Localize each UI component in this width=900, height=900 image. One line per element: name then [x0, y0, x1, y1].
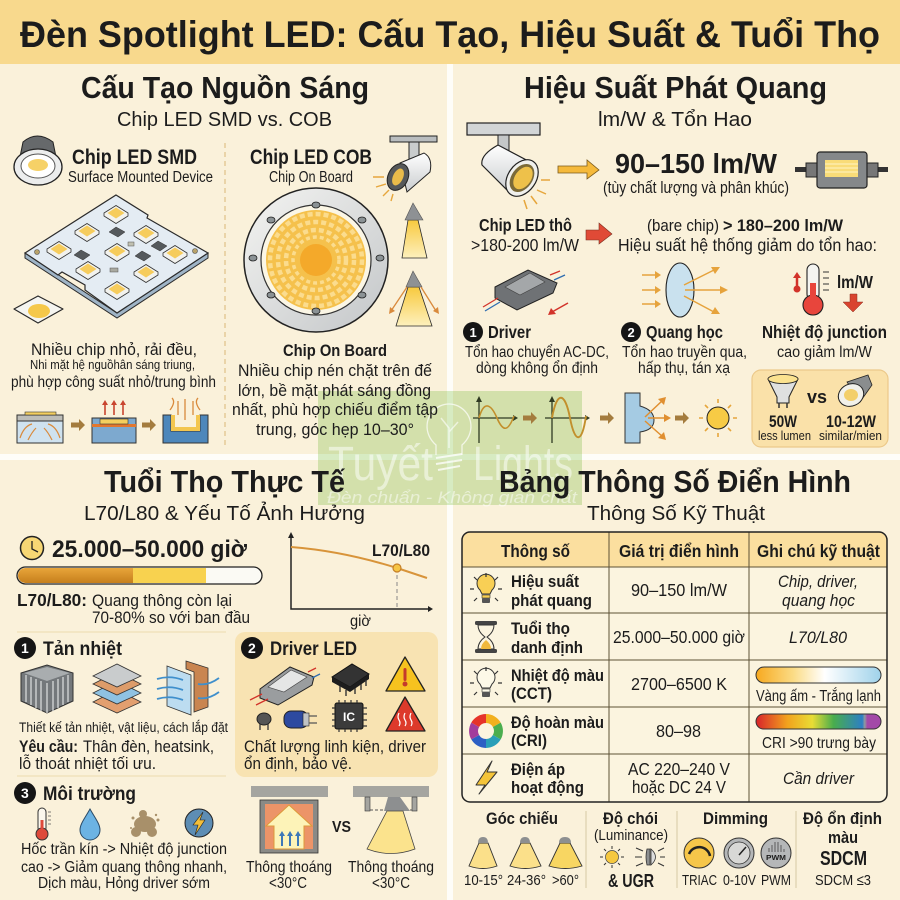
icon: downlight	[14, 136, 62, 185]
icon: thermometer	[36, 808, 51, 840]
scene: enclosed recess	[246, 786, 332, 892]
icon: dust	[130, 810, 160, 837]
watermark: Tuyết	[328, 438, 433, 491]
loss 2: optics: Tổn hao truyền qua,	[622, 344, 747, 361]
panel: tuổi thọ thực tế	[0, 460, 447, 900]
factor 3: environment	[14, 782, 227, 892]
SMD description	[11, 340, 216, 391]
heading: Hiệu Suất Phát Quang	[524, 70, 827, 105]
scene: ventilated: Thông thoáng	[348, 859, 434, 876]
watermark: Lights	[473, 438, 573, 491]
SMD board	[25, 195, 208, 318]
factor 3: environment: Môi trường	[43, 784, 136, 805]
callout: 50W vs 10-12W: vs	[807, 387, 827, 407]
row: tuổi thọ: 25.000–50.000 giờ	[613, 627, 745, 647]
row: tuổi thọ: danh định	[511, 638, 583, 657]
scene: ventilated	[348, 786, 434, 892]
SMD heading: Chip LED SMD	[72, 145, 197, 169]
row: điện áp	[476, 759, 855, 797]
VS label: VS	[332, 819, 351, 836]
icon: LED module	[795, 152, 888, 188]
divider	[17, 631, 226, 633]
factor 1: heat dissipation	[14, 637, 228, 773]
dimming: 0-10V	[723, 872, 756, 889]
beam angle: >60°	[552, 872, 579, 889]
factor 1: heat dissipation: Thân đèn, heatsink,	[83, 738, 214, 756]
icon: heat warning triangle	[386, 697, 425, 731]
row: hiệu suất	[470, 572, 858, 610]
row: nhiệt độ màu: (CCT)	[511, 684, 552, 703]
callout: 50W vs 10-12W: 10-12W	[826, 413, 876, 431]
loss 2: optics: 2	[628, 325, 635, 340]
arrow	[558, 160, 599, 179]
row: tuổi thọ: Tuổi thọ	[511, 619, 570, 638]
beam angle: 10-15°	[464, 872, 503, 889]
factor 1: heat dissipation: Thiết kế tản nhiệt, vật liệu, cách lắp đặt	[19, 720, 228, 735]
dimming: TRIAC	[682, 872, 717, 889]
beam angle: Góc chiếu	[486, 809, 558, 828]
dimming	[682, 809, 791, 889]
icon: thermometer and falling lm/W: lm/W	[837, 272, 873, 292]
callout: 50W vs 10-12W: 50W	[769, 413, 797, 431]
wave diagrams and optics flow	[473, 393, 737, 443]
wide beam icon	[389, 271, 439, 326]
icon: driver	[483, 270, 568, 315]
COB description: lớn, bề mặt phát sáng đồng	[238, 381, 431, 400]
key efficacy value: 90–150 lm/W	[615, 148, 778, 179]
SMD description: phù hợp công suất nhỏ/trung bình	[11, 374, 216, 391]
icon: lens	[642, 263, 728, 317]
loss 2: optics	[621, 322, 747, 377]
row: hiệu suất: quang học	[782, 591, 855, 610]
table header: Ghi chú kỹ thuật	[757, 541, 880, 561]
dimming: PWM	[761, 872, 791, 889]
COB heading: Chip LED COB	[250, 145, 372, 169]
row: hiệu suất: 90–150 lm/W	[631, 580, 727, 600]
row: nhiệt độ màu: 2700–6500 K	[631, 674, 727, 694]
SMD subtitle: Surface Mounted Device	[68, 169, 213, 186]
factor 2: LED driver panel: Chất lượng linh kiện, driver	[244, 738, 426, 756]
narrow beam icon	[402, 203, 427, 258]
color stability: Độ ổn định	[803, 809, 882, 828]
row: hiệu suất: phát quang	[511, 591, 592, 610]
row: độ hoàn màu	[474, 713, 881, 752]
row: độ hoàn màu: (CRI)	[511, 731, 547, 750]
scene: ventilated: <30°C	[372, 875, 410, 892]
loss 2: optics: Quang học	[646, 322, 723, 342]
icon: clock	[20, 536, 44, 560]
loss 3: junction temperature: cao giảm lm/W	[777, 344, 872, 361]
heading: Cấu Tạo Nguồn Sáng	[81, 70, 369, 105]
L70/L80 definition: Quang thông còn lại	[92, 591, 232, 610]
icon: warning triangle	[386, 657, 425, 691]
raw chip label: Chip LED thô	[479, 215, 572, 235]
factor 2: LED driver panel: ổn định, bảo vệ.	[244, 755, 352, 773]
callout: 50W vs 10-12W: less lumen	[758, 428, 811, 443]
lifetime bar	[17, 567, 262, 584]
COB description: Nhiều chip nén chặt trên đế	[238, 361, 433, 380]
callout: 50W vs 10-12W: similar/mien	[819, 428, 882, 443]
icon: components	[257, 700, 367, 732]
icon: track spotlight	[467, 123, 550, 209]
color stability: SDCM ≤3	[815, 872, 871, 889]
factor 3: environment: cao -> Giảm quang thông nhanh,	[21, 859, 227, 876]
row: tuổi thọ	[475, 619, 848, 657]
table header: Giá trị điển hình	[619, 541, 739, 561]
dimming: Dimming	[703, 809, 768, 828]
subheading: lm/W & Tổn Hao	[598, 109, 752, 131]
dimming: PWM	[766, 853, 786, 862]
icon: chip	[332, 664, 369, 696]
factor 2: LED driver panel	[235, 632, 438, 777]
header band	[0, 0, 900, 64]
divider	[17, 775, 226, 777]
icon: track spotlight	[373, 136, 437, 201]
COB description	[232, 341, 438, 439]
L70/L80 definition: 70-80% so với ban đầu	[92, 608, 250, 627]
table header	[501, 541, 880, 561]
COB description: nhất, phù hợp chiếu điểm tập	[232, 400, 438, 419]
divider	[224, 143, 226, 445]
row: điện áp: AC 220–240 V	[628, 759, 730, 779]
factor 1: heat dissipation: Yêu cầu:	[19, 738, 78, 756]
icon: heatsink	[21, 665, 73, 713]
single SMD chip	[14, 296, 63, 323]
loss 1: driver	[463, 322, 609, 377]
icon: water drop	[80, 809, 100, 840]
icon: thermometer and falling lm/W	[793, 264, 873, 315]
row: hiệu suất: Hiệu suất	[511, 572, 579, 591]
spec table	[462, 532, 887, 802]
heading: Tuổi Thọ Thực Tế	[104, 464, 346, 499]
lumen decay chart: giờ	[350, 613, 371, 630]
loss 1: driver: Driver	[488, 322, 531, 342]
icon: driver	[250, 667, 320, 705]
luminance and UGR: (Luminance)	[594, 827, 668, 844]
factor 3: environment: 3	[21, 785, 29, 801]
color stability: SDCM	[820, 848, 867, 870]
row: điện áp: Điện áp	[511, 760, 565, 779]
panel: bảng thông số điển hình	[453, 460, 900, 900]
scene: enclosed recess: Thông thoáng	[246, 859, 332, 876]
icon: heat plates and airflow	[157, 661, 219, 715]
factor 1: heat dissipation: lỗ thoát nhiệt tối ưu.	[19, 754, 156, 773]
panel: hiệu suất phát quang	[453, 64, 900, 454]
lifetime value: 25.000–50.000 giờ	[52, 536, 248, 563]
heading: Bảng Thông Số Điển Hình	[499, 464, 851, 499]
factor 1: heat dissipation: Tản nhiệt	[43, 639, 123, 660]
lumen decay chart	[288, 532, 433, 630]
row: nhiệt độ màu	[470, 666, 881, 705]
factor 3: environment: Hốc trần kín -> Nhiệt độ junction	[21, 841, 227, 858]
loss intro	[618, 216, 877, 255]
title: Đèn Spotlight LED: Cấu Tạo, Hiệu Suất & Tuổi Thọ	[20, 14, 880, 55]
COB description: Chip On Board	[283, 341, 387, 360]
icon: components: IC	[343, 710, 355, 724]
row: điện áp: hoạt động	[511, 778, 584, 797]
row: nhiệt độ màu: Nhiệt độ màu	[511, 666, 604, 685]
SMD description: Nhi mặt hệ nguồhân sáng triung,	[30, 358, 195, 372]
beam angle	[464, 809, 582, 889]
loss intro: (bare chip)	[647, 216, 719, 235]
luminance and UGR: & UGR	[608, 871, 654, 891]
dividers	[586, 811, 796, 888]
loss 1: driver: dòng không ổn định	[476, 360, 598, 377]
factor 3: environment: Dịch màu, Hỏng driver sớm	[38, 875, 210, 892]
lumen decay chart: L70/L80	[372, 541, 430, 560]
factor 1: heat dissipation: 1	[21, 640, 29, 656]
subheading: Chip LED SMD vs. COB	[117, 109, 332, 131]
luminance and UGR	[594, 809, 668, 891]
panel: cấu tạo nguồn sáng	[0, 64, 447, 454]
watermark: Đèn chuẩn - Không gian chất	[327, 488, 578, 507]
L70/L80 definition: L70/L80:	[17, 590, 87, 610]
row: độ hoàn màu: 80–98	[656, 721, 701, 741]
SMD description: Nhiều chip nhỏ, rải đều,	[31, 340, 197, 359]
L70/L80 definition	[17, 590, 250, 627]
color stability	[803, 809, 882, 889]
scene: enclosed recess: <30°C	[269, 875, 307, 892]
loss 1: driver: Tổn hao chuyển AC-DC,	[465, 344, 609, 361]
row: điện áp: Cần driver	[783, 769, 855, 788]
row: độ hoàn màu: Độ hoàn màu	[511, 713, 604, 732]
efficacy note: (tùy chất lượng và phân khúc)	[603, 179, 789, 197]
watermark	[318, 391, 582, 507]
callout: 50W vs 10-12W	[752, 370, 888, 447]
red arrow	[586, 223, 612, 244]
color stability: màu	[828, 828, 858, 847]
heat path diagrams	[17, 398, 208, 443]
loss intro: Hiệu suất hệ thống giảm do tổn hao:	[618, 235, 877, 255]
COB module	[244, 188, 388, 332]
factor 2: LED driver panel: 2	[248, 640, 256, 656]
loss intro: > 180–200 lm/W	[723, 216, 844, 235]
icon: power surge	[185, 809, 213, 837]
row: hiệu suất: Chip, driver,	[778, 572, 858, 591]
row: tuổi thọ: L70/L80	[789, 628, 848, 647]
loss 1: driver: 1	[470, 325, 477, 340]
raw chip label: >180-200 lm/W	[471, 235, 579, 255]
luminance and UGR: Độ chói	[603, 809, 658, 828]
beam angle: 24-36°	[507, 872, 546, 889]
icon: material layers	[93, 664, 141, 713]
COB description: trung, góc hẹp 10–30°	[256, 420, 414, 439]
raw chip label	[471, 215, 579, 255]
subheading: L70/L80 & Yếu Tố Ảnh Hưởng	[84, 502, 365, 525]
row: điện áp: hoặc DC 24 V	[632, 777, 726, 797]
loss 2: optics: hấp thụ, tán xạ	[638, 360, 730, 377]
loss 3: junction temperature	[762, 322, 887, 361]
COB subtitle: Chip On Board	[269, 169, 353, 186]
subheading: Thông Số Kỹ Thuật	[587, 503, 765, 525]
row: độ hoàn màu: CRI >90 trưng bày	[762, 735, 876, 752]
table header: Thông số	[501, 541, 570, 561]
factor 2: LED driver panel: Driver LED	[270, 639, 357, 660]
